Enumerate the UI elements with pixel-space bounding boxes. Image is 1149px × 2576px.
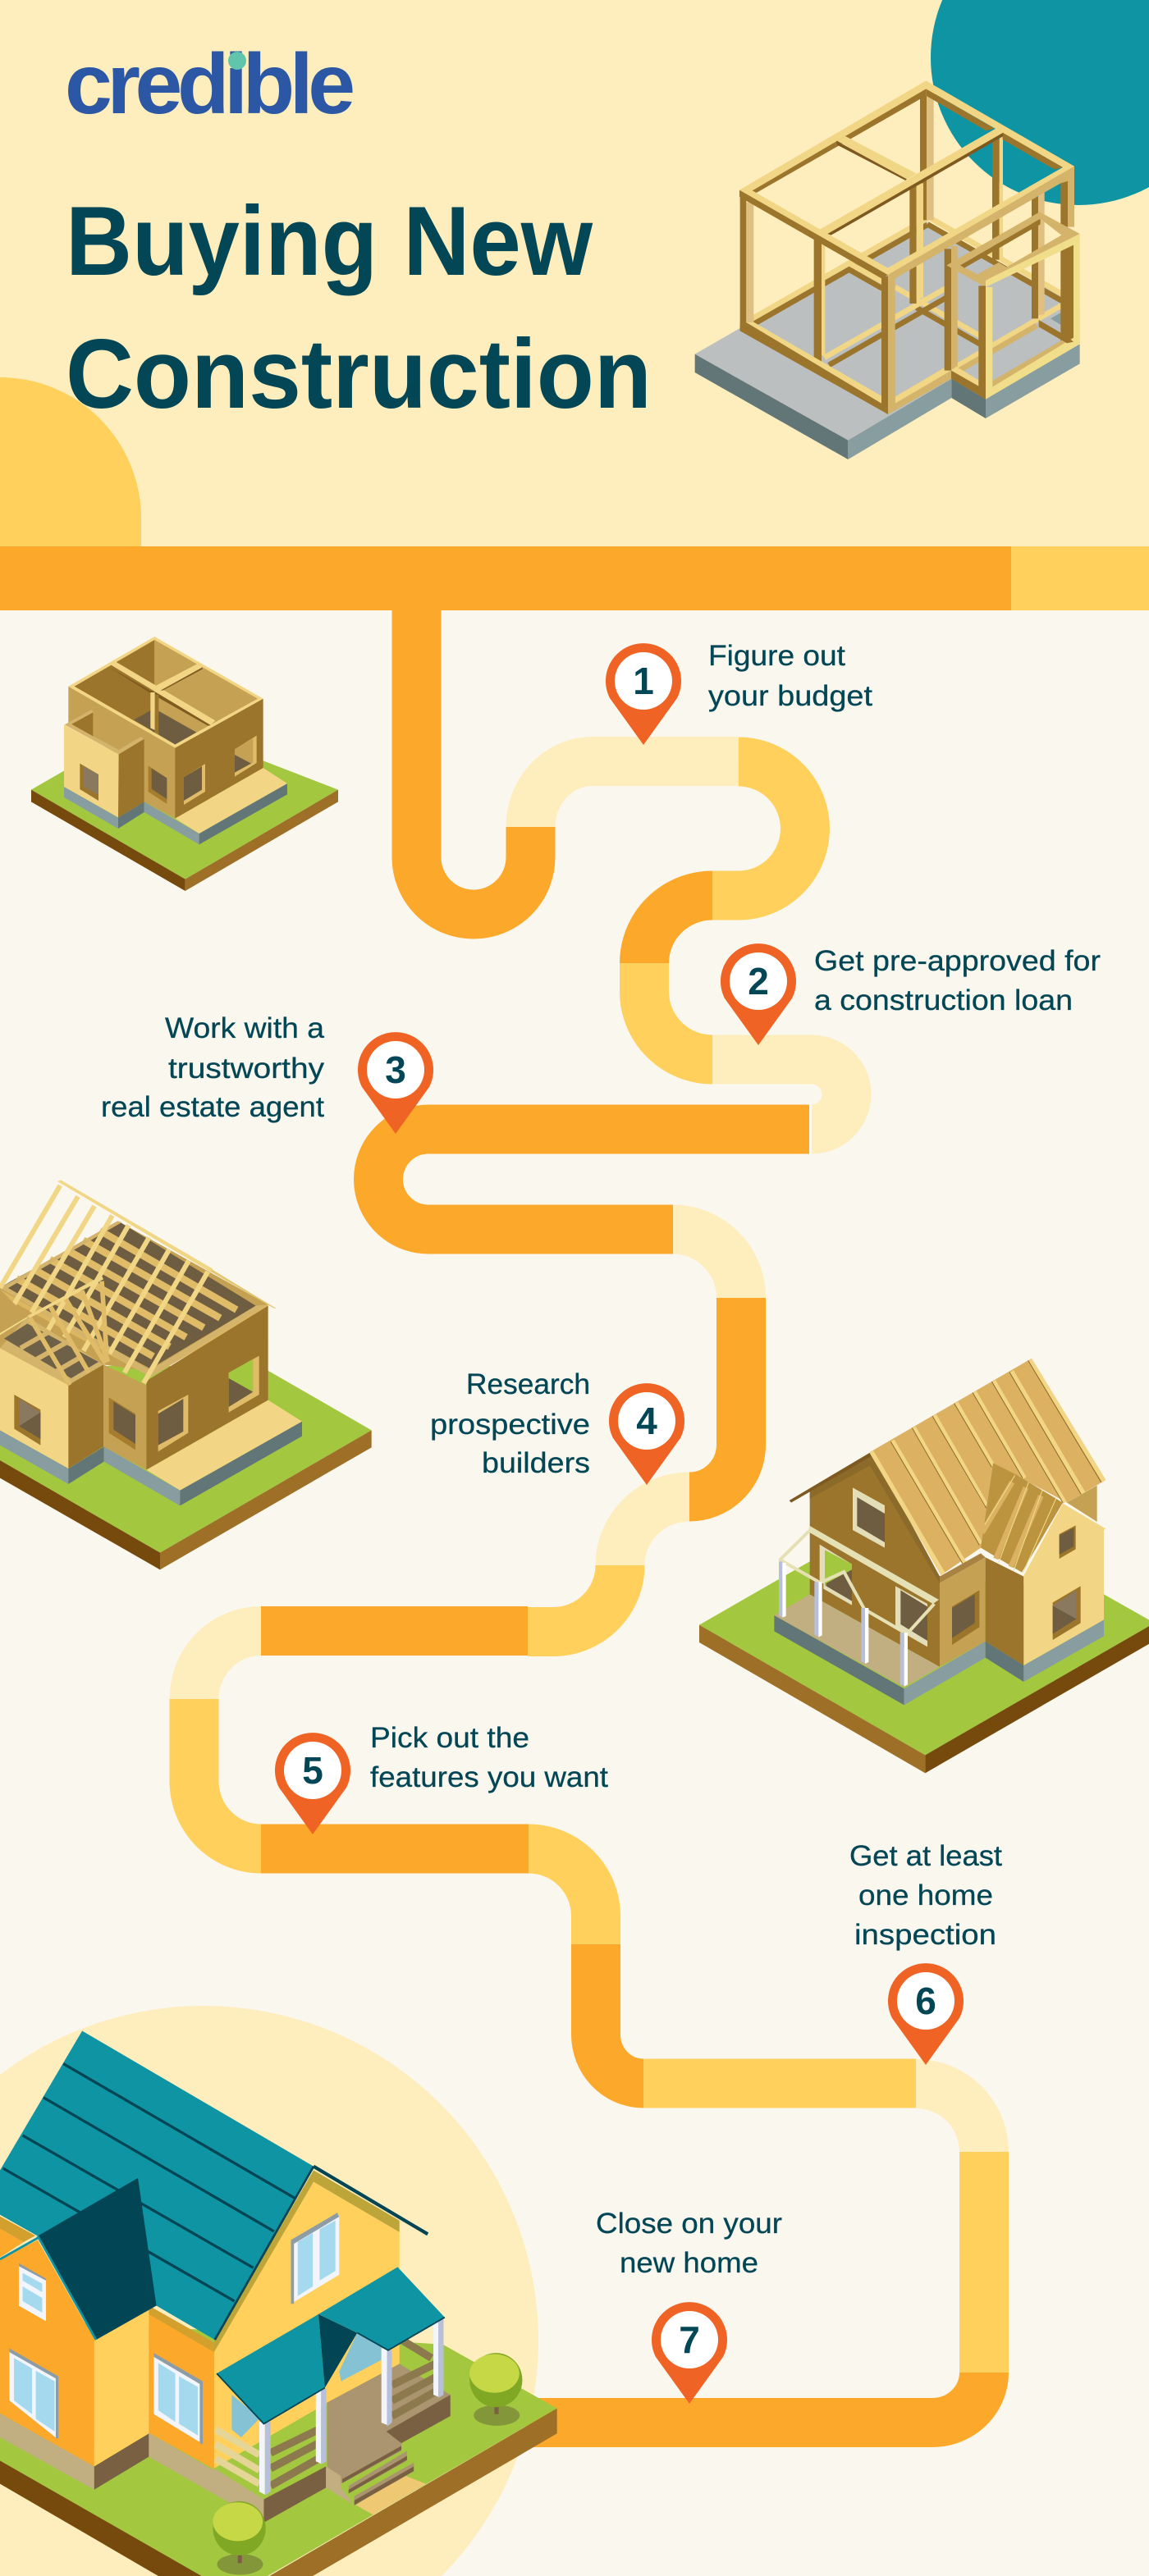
step 1 pin (606, 643, 681, 745)
step 4 label: Research (466, 1368, 590, 1400)
step 3 label: Work with a (165, 1012, 325, 1044)
yellow semicircle (0, 377, 141, 546)
step 5 label: Pick out the (370, 1722, 529, 1754)
step 3 label: trustworthy (168, 1053, 325, 1085)
illustration: sheathed roof house (699, 1359, 1149, 1773)
step 3 pin (358, 1032, 433, 1134)
step 5 pin (275, 1733, 350, 1834)
step 6 label: one home (858, 1879, 993, 1911)
step 4 pin: 4 (636, 1400, 657, 1442)
step 2 label (814, 945, 1101, 1016)
window: large left (9, 2348, 58, 2438)
header background (0, 0, 1149, 546)
step 1 pin: 1 (633, 660, 654, 702)
step 3 label: real estate agent (101, 1091, 324, 1123)
window: upper right (291, 2213, 339, 2304)
step 6 label: Get at least (849, 1840, 1002, 1872)
illustration: walls without roof (31, 637, 338, 891)
step 2 label: a construction loan (814, 984, 1073, 1016)
window: large center (153, 2353, 203, 2444)
top path band (0, 546, 1149, 610)
title (66, 186, 652, 429)
step 3 pin: 3 (385, 1048, 406, 1091)
step 6 label: inspection (854, 1919, 996, 1951)
step 3 label (101, 1012, 325, 1123)
step 1 label: your budget (708, 680, 872, 712)
illustration: house frame on slab (695, 80, 1080, 459)
title: Construction (66, 319, 652, 429)
step 4 label: builders (482, 1447, 590, 1479)
step 1 label: Figure out (708, 640, 845, 672)
step 4 label: prospective (430, 1409, 590, 1441)
step 6 pin: 6 (915, 1980, 936, 2022)
step 6 pin (888, 1963, 964, 2065)
step 7 label: new home (620, 2247, 758, 2279)
step 5 label: features you want (370, 1761, 608, 1793)
step 5 pin: 5 (302, 1749, 323, 1792)
step 7 label (596, 2208, 782, 2279)
step 7 pin: 7 (679, 2318, 700, 2361)
window: small gable (19, 2263, 46, 2321)
step 6 label (849, 1840, 1002, 1951)
tree right (469, 2353, 522, 2426)
step 7 pin (652, 2302, 727, 2404)
illustration: finished house (0, 2031, 557, 2576)
step 2 label: Get pre-approved for (814, 945, 1101, 977)
illustration: roof trusses (0, 1180, 372, 1569)
step 4 pin (609, 1383, 684, 1485)
winding path (194, 610, 984, 2423)
step 2 pin (721, 943, 796, 1045)
step 2 pin: 2 (748, 960, 769, 1003)
step 4 label (430, 1368, 590, 1479)
tree front (213, 2501, 266, 2575)
logo: credible: credible (65, 37, 353, 132)
step 7 label: Close on your (596, 2208, 782, 2240)
cream circle behind finished house (0, 2006, 538, 2576)
teal circle (931, 0, 1149, 205)
step 5 label (370, 1722, 608, 1793)
title: Buying New (66, 186, 593, 296)
step 1 label (708, 640, 872, 712)
